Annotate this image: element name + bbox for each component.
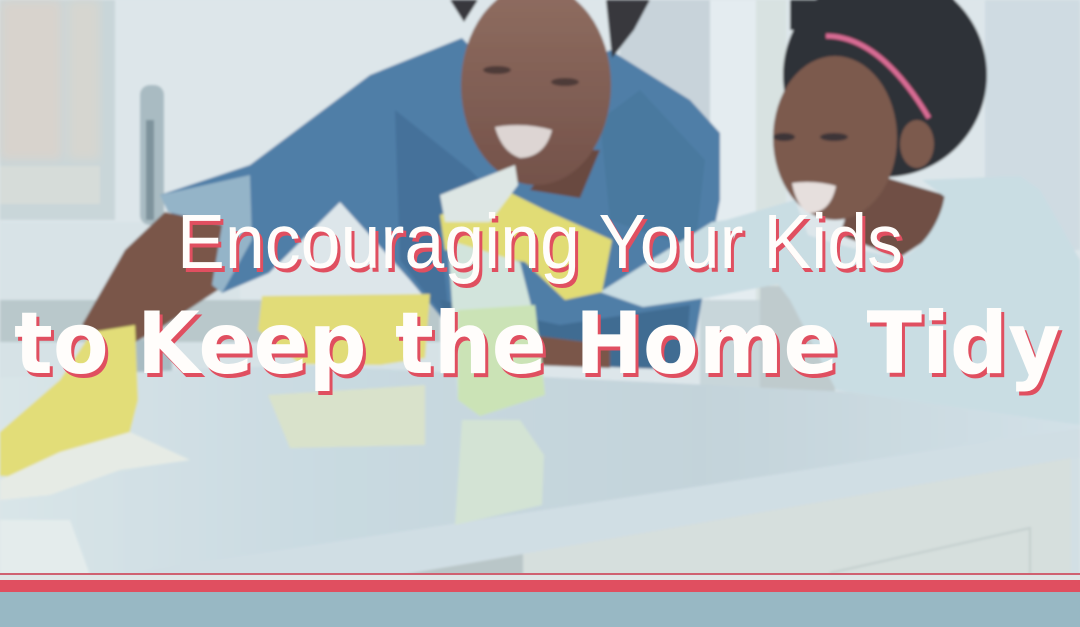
counter front edge [124,428,1080,575]
teal footer [0,592,1080,627]
man: arm [82,212,225,345]
man: denim shirt [82,0,720,370]
red band [0,580,1080,592]
girl: white shirt [600,176,1080,425]
cabinet [400,554,523,575]
yellow gloves [0,190,612,478]
window [0,0,115,220]
reflections [268,385,425,448]
spray bottle [440,165,545,416]
cloth [0,432,190,500]
thin red line [0,573,1080,575]
faucet [134,85,172,440]
counter top [0,365,1080,575]
backsplash and left counter [0,222,240,302]
title line 1: Encouraging Your Kids [177,199,903,285]
man: head [530,150,600,198]
girl [600,0,1080,425]
